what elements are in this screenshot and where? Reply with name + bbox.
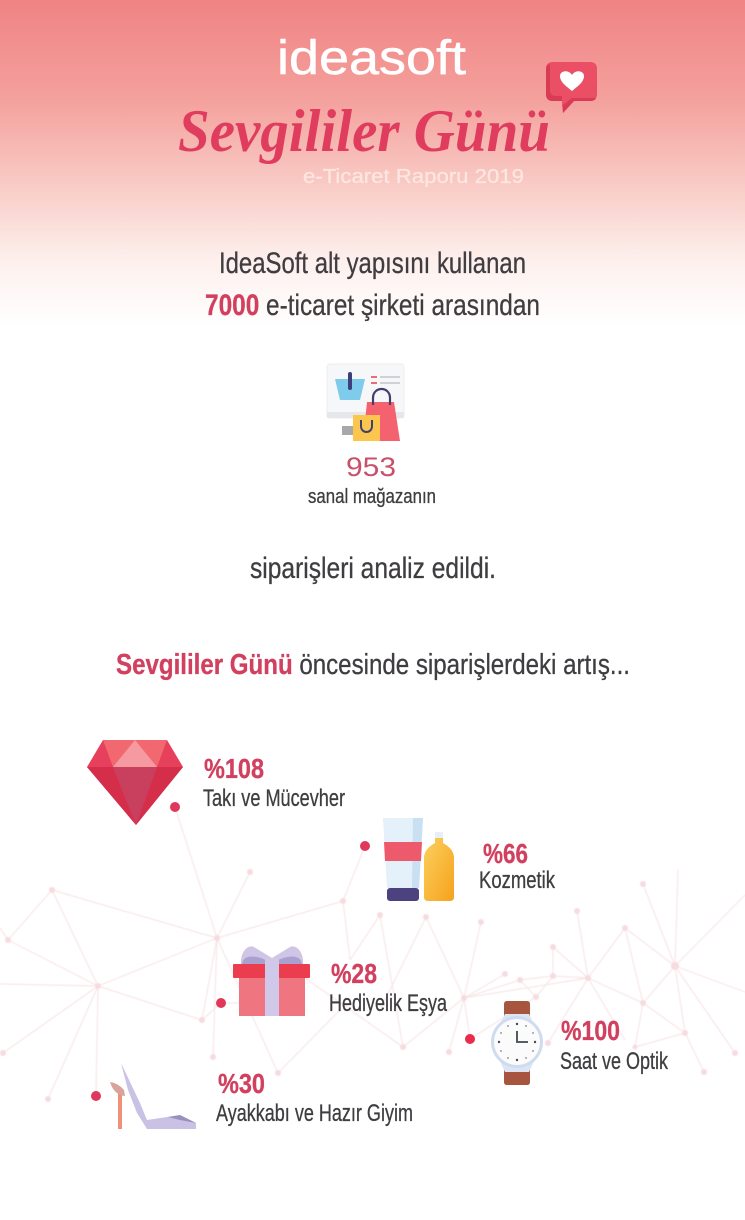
text: siparişleri analiz edildi: siparişleri analiz edildi. <box>250 552 496 585</box>
value %30: %30 <box>218 1068 265 1099</box>
icon: cosmetics tube and bottle <box>383 818 454 901</box>
item: cosmetics <box>360 818 556 901</box>
label Saat ve Optik: Saat ve Optik <box>560 1048 669 1075</box>
icon: diamond <box>87 740 183 825</box>
intro line 2: 7000 e-ticaret şirketi arasından <box>205 289 540 322</box>
icon: online store <box>327 364 404 441</box>
background network pattern <box>0 807 745 1102</box>
label Ayakkabı ve Hazır Giyim: Ayakkabı ve Hazır Giyim <box>216 1100 413 1127</box>
label Kozmetik: Kozmetik <box>479 867 556 894</box>
title: Sevgililer Günü: Sevgililer Günü <box>178 98 550 164</box>
value %108: %108 <box>204 753 264 784</box>
label Hediyelik Eşya: Hediyelik Eşya <box>329 990 447 1017</box>
marker dot <box>170 802 180 812</box>
value %28: %28 <box>331 958 377 989</box>
item: jewellery <box>87 740 345 825</box>
value %100: %100 <box>561 1015 620 1046</box>
marker dot <box>91 1091 101 1101</box>
heading: order increase: Sevgililer Günü öncesinde siparişlerdeki artış... <box>116 649 630 681</box>
label: sanal mağazanın: sanal mağazanın <box>308 486 436 508</box>
item: shoes and apparel <box>91 1063 413 1129</box>
marker dot <box>360 841 370 851</box>
icon: speech bubble with heart <box>546 62 597 113</box>
stat: 953: 953 <box>346 452 396 482</box>
marker dot <box>216 998 226 1008</box>
item: gifts <box>216 946 447 1017</box>
icon: wrist watch <box>491 1001 543 1085</box>
item: watches <box>465 1001 669 1085</box>
icon: high heel shoe <box>110 1063 196 1129</box>
subtitle: e-Ticaret Raporu 2019: e-Ticaret Raporu 2019 <box>303 166 524 188</box>
logo: ideasoft: ideasoft <box>277 32 466 85</box>
intro line 1: IdeaSoft alt yapısını kullanan <box>219 247 526 280</box>
header gradient background <box>0 0 745 326</box>
marker dot <box>465 1034 475 1044</box>
icon: gift box <box>233 946 310 1016</box>
label Takı ve Mücevher: Takı ve Mücevher <box>203 785 345 812</box>
value %66: %66 <box>483 838 528 869</box>
